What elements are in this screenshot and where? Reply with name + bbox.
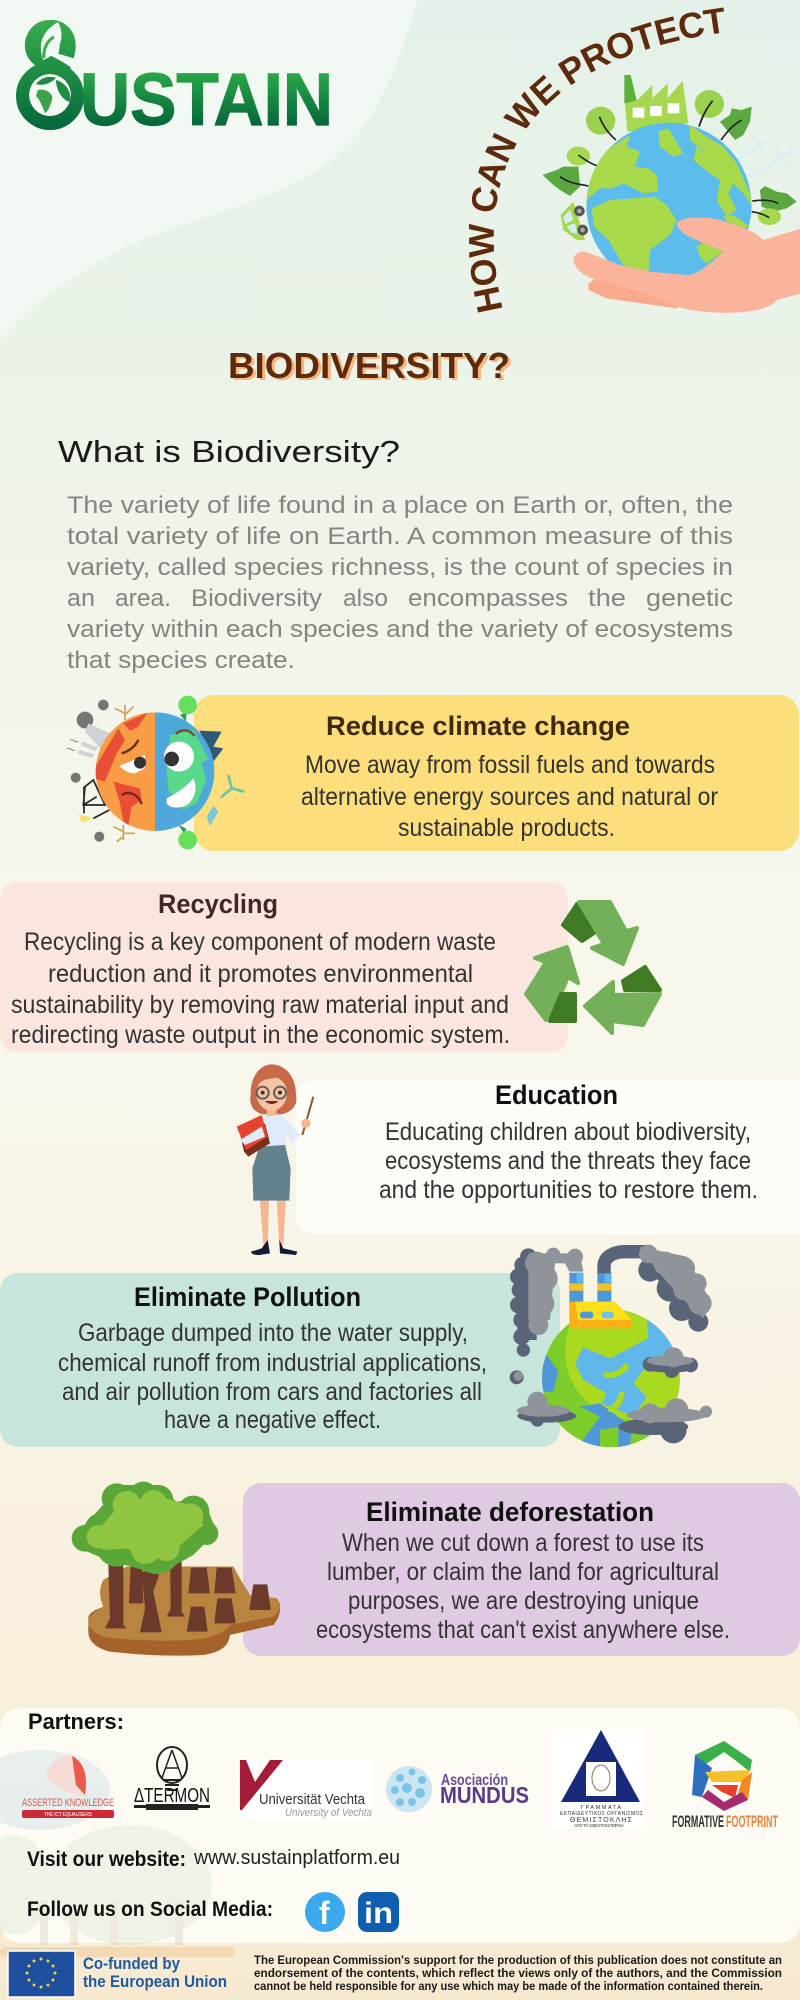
smoke left bbox=[510, 1248, 583, 1357]
faint background trees bbox=[0, 1750, 212, 1945]
panel: reduce climate change: sustainable products. bbox=[398, 814, 615, 842]
definition paragraph: that species create. bbox=[67, 647, 295, 674]
definition paragraph: an bbox=[67, 585, 95, 612]
skirt bbox=[252, 1145, 291, 1201]
panel: eliminate deforestation: When we cut down a forest to use its bbox=[342, 1529, 704, 1557]
panel: recycling: reduction and it promotes environmental bbox=[48, 960, 473, 988]
stumps bbox=[187, 1568, 271, 1632]
partners heading: Partners: bbox=[28, 1709, 124, 1734]
logo: themistokles bbox=[552, 1729, 645, 1829]
logo: formative footprint bbox=[672, 1741, 778, 1831]
shoes bbox=[251, 1240, 297, 1255]
website url: www.sustainplatform.eu bbox=[193, 1847, 400, 1869]
car bbox=[561, 202, 588, 240]
panel: eliminate pollution: Eliminate Pollution bbox=[134, 1282, 361, 1312]
face bbox=[119, 730, 196, 808]
legs bbox=[260, 1201, 286, 1245]
definition paragraph: Biodiversity bbox=[191, 585, 322, 612]
definition paragraph: genetic bbox=[646, 585, 733, 612]
logo: themistokles: ΘΕΜΙΣΤΟΚΛΗΣ bbox=[570, 1817, 633, 1824]
logo: asserted knowledge: ASSERTED KNOWLEDGE bbox=[22, 1797, 114, 1809]
earth halves bbox=[93, 712, 214, 831]
logo: asociacion mundus: MUNDUS bbox=[440, 1782, 529, 1808]
ground side bbox=[88, 1567, 280, 1656]
logo S mark bbox=[23, 22, 77, 123]
eu disclaimer: endorsement of the contents, which reflect the views only of the authors, and the Commission bbox=[254, 1968, 782, 1980]
website label: Visit our website: bbox=[27, 1848, 186, 1871]
logo: universitat vechta: Universität Vechta bbox=[259, 1791, 366, 1808]
smoke right bbox=[604, 1245, 712, 1332]
definition paragraph: total variety of life on Earth. A common measure of this bbox=[67, 523, 733, 550]
panel: recycling: Recycling is a key component of modern waste bbox=[24, 928, 496, 956]
icon: polluted earth bbox=[510, 1245, 712, 1448]
panel: eliminate deforestation bbox=[243, 1483, 800, 1656]
icon: teacher bbox=[237, 1064, 313, 1255]
social label: Follow us on Social Media: bbox=[27, 1898, 273, 1921]
icon: deforested land bbox=[72, 1482, 280, 1656]
panel: eliminate deforestation: Eliminate deforestation bbox=[366, 1497, 654, 1527]
dead trees bbox=[113, 705, 135, 842]
eu co-funded text bbox=[83, 1954, 227, 1991]
earth bbox=[586, 123, 753, 288]
panel: reduce climate change bbox=[194, 695, 799, 851]
logo: asserted knowledge: THE ICT EQUALISERS bbox=[44, 1812, 93, 1818]
icon: facebook: f bbox=[319, 1895, 330, 1931]
panel: eliminate deforestation: ecosystems that can't exist anywhere else. bbox=[316, 1616, 730, 1644]
neck bbox=[267, 1108, 277, 1118]
logo: themistokles: ΓΡΑΜΜΑΤΑ bbox=[581, 1805, 621, 1811]
curved heading: how can we protect: HOW CAN WE PROTECT bbox=[468, 8, 724, 312]
panel: reduce climate change: alternative energy sources and natural or bbox=[301, 783, 718, 811]
panel: recycling bbox=[0, 882, 568, 1052]
footer band decor bbox=[0, 1947, 235, 1957]
panel: recycling: sustainability by removing raw material input and bbox=[11, 991, 509, 1019]
arm and hand bbox=[240, 1127, 265, 1145]
background light blob bbox=[0, 0, 418, 340]
logo: asserted knowledge bbox=[22, 1755, 114, 1818]
panel: education bbox=[296, 1080, 800, 1234]
hair bbox=[250, 1064, 296, 1114]
panel: eliminate deforestation: lumber, or claim the land for agricultural bbox=[327, 1558, 719, 1586]
definition paragraph: area. bbox=[115, 585, 171, 612]
eu disclaimer: The European Commission's support for the production of this publication does not constitute an bbox=[254, 1955, 782, 1967]
chimneys bbox=[569, 1273, 611, 1303]
panel: education: ecosystems and the threats they face bbox=[385, 1147, 751, 1175]
panel: education: Education bbox=[495, 1080, 618, 1110]
definition paragraph bbox=[67, 492, 733, 674]
panel: eliminate deforestation: purposes, we are destroying unique bbox=[348, 1587, 699, 1615]
panel: eliminate pollution: chemical runoff from industrial applications, bbox=[58, 1349, 487, 1377]
eu disclaimer bbox=[254, 1955, 782, 1993]
definition paragraph: variety within each species and the variety of ecosystems bbox=[67, 616, 733, 643]
trees around globe bbox=[543, 90, 797, 225]
logo wordmark: USTAIN bbox=[80, 58, 333, 141]
heading: biodiversity: BIODIVERSITY? bbox=[228, 345, 510, 386]
panel: eliminate pollution: have a negative effect. bbox=[164, 1406, 381, 1434]
definition paragraph: The variety of life found in a place on Earth or, often, the bbox=[67, 492, 733, 519]
logo: asociacion mundus bbox=[386, 1766, 529, 1812]
ground top bbox=[88, 1567, 280, 1641]
factory base bbox=[569, 1302, 632, 1328]
definition paragraph: the bbox=[588, 585, 626, 612]
illustration: hand holding earth bbox=[543, 75, 800, 313]
panel: recycling: Recycling bbox=[158, 889, 278, 919]
panel: education: and the opportunities to restore them. bbox=[379, 1176, 758, 1204]
logo globe bbox=[29, 74, 71, 116]
eu co-funded text: the European Union bbox=[83, 1972, 227, 1991]
wind turbines faint bbox=[737, 137, 797, 177]
panel: reduce climate change: Reduce climate change bbox=[326, 711, 630, 741]
logo: Sustain bbox=[23, 22, 333, 141]
logo: universitat vechta: University of Vechta bbox=[285, 1807, 372, 1819]
globe bbox=[542, 1310, 680, 1448]
book bbox=[240, 1123, 270, 1157]
blouse bbox=[258, 1115, 300, 1150]
panel: eliminate pollution: Garbage dumped into the water supply, bbox=[78, 1319, 468, 1347]
panel: eliminate pollution: and air pollution from cars and factories all bbox=[62, 1378, 482, 1406]
factory bbox=[624, 75, 688, 132]
pointer bbox=[302, 1097, 313, 1135]
icon: facebook bbox=[305, 1892, 345, 1932]
panel: partners and contacts bbox=[0, 1708, 800, 1943]
hand bbox=[573, 218, 800, 313]
subheading: what is biodiversity: What is Biodiversity? bbox=[58, 434, 400, 469]
panel: recycling: redirecting waste output in the economic system. bbox=[11, 1021, 510, 1049]
eu co-funded text: Co-funded by bbox=[83, 1954, 180, 1973]
head bbox=[256, 1076, 287, 1111]
icon: recycling arrows bbox=[526, 902, 660, 1033]
panel: education: Educating children about biodiversity, bbox=[385, 1118, 751, 1146]
icon: linkedin: in bbox=[364, 1897, 393, 1930]
trunks bbox=[105, 1555, 185, 1632]
logo: atermon: ΔTERMON bbox=[134, 1785, 210, 1807]
pollution clouds bbox=[510, 1347, 712, 1443]
logo: atermon bbox=[134, 1747, 210, 1810]
definition paragraph: encompasses bbox=[408, 585, 568, 612]
panel: eliminate pollution bbox=[0, 1273, 560, 1447]
heading: biodiversity: BIODIVERSITY? bbox=[231, 347, 513, 388]
panel: reduce climate change: Move away from fossil fuels and towards bbox=[305, 751, 715, 779]
canopy bbox=[72, 1482, 218, 1574]
icon: two-sided climate earth bbox=[67, 696, 244, 849]
smoke and factory bbox=[67, 700, 110, 842]
icon: linkedin bbox=[358, 1892, 399, 1932]
logo: asociacion mundus: Asociación bbox=[441, 1772, 508, 1789]
glasses bbox=[257, 1087, 286, 1099]
eu flag bbox=[8, 1951, 75, 1997]
logo: themistokles: ΑΠΟ ΤΟ 1969 ΣΤΟΝ ΠΕΙΡΑΙΑ bbox=[574, 1823, 624, 1828]
logo: universitat vechta bbox=[240, 1759, 372, 1820]
trees and turbine bbox=[178, 696, 244, 849]
definition paragraph: variety, called species richness, is the count of species in bbox=[67, 554, 733, 581]
definition paragraph: also bbox=[343, 585, 388, 612]
logo: formative footprint: FORMATIVE bbox=[672, 1812, 724, 1831]
eu disclaimer: cannot be held responsible for any use which may be made of the information contained therein. bbox=[254, 1981, 763, 1993]
logo: themistokles: ΕΚΠΑΙΔΕΥΤΙΚΟΣ ΟΡΓΑΝΙΣΜΟΣ bbox=[560, 1811, 643, 1817]
